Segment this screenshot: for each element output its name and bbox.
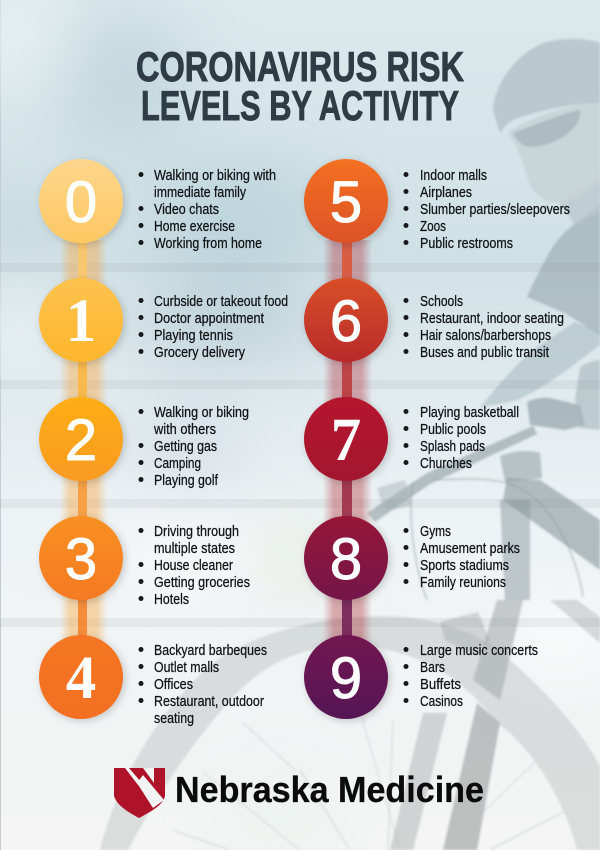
helmet <box>493 39 600 133</box>
risk level 8: Sports stadiums <box>420 558 509 574</box>
risk level 3: Getting groceries <box>154 575 250 591</box>
risk level 4: 4 <box>66 645 96 712</box>
risk level 6: Hair salons/barbershops <box>420 328 551 344</box>
risk level 3: multiple states <box>154 541 235 557</box>
risk level 2: Playing golf <box>154 473 219 489</box>
icon: shield <box>114 768 165 818</box>
title: LEVELS BY ACTIVITY <box>141 82 459 129</box>
risk level 5: Slumber parties/sleepovers <box>420 202 570 218</box>
risk level 6: Restaurant, indoor seating <box>420 311 564 327</box>
risk level 3: Hotels <box>154 592 189 608</box>
risk level 4: Offices <box>154 677 193 693</box>
risk level 0: Video chats <box>154 202 219 218</box>
risk level 9: Casinos <box>420 694 463 710</box>
risk level 4 <box>39 635 267 727</box>
connector lines: right column <box>323 240 372 680</box>
risk level 9: Buffets <box>420 677 461 693</box>
risk level 0: 0 <box>65 170 97 235</box>
risk level 5: Public restrooms <box>420 236 513 252</box>
risk level 4: Backyard barbeques <box>154 643 267 659</box>
risk level 0: Working from home <box>154 236 262 252</box>
sunglasses <box>513 110 580 147</box>
risk level 1: Playing tennis <box>154 328 233 344</box>
risk level 6 <box>304 278 564 362</box>
risk level 0: immediate family <box>154 185 247 201</box>
risk level 1: 1 <box>66 288 96 355</box>
risk level 8 <box>304 516 520 600</box>
risk level 4: Outlet malls <box>154 660 219 676</box>
risk level 5: 5 <box>330 170 362 235</box>
risk level 2: with others <box>153 422 216 438</box>
risk level 7: Splash pads <box>420 439 485 455</box>
risk level 2: Walking or biking <box>154 405 249 421</box>
risk level 4: seating <box>154 711 194 727</box>
risk level 2: 2 <box>65 408 97 473</box>
risk level 6: Buses and public transit <box>420 345 549 361</box>
risk level 8: 8 <box>330 527 362 592</box>
risk level 3: Driving through <box>154 524 239 540</box>
risk level 9: 9 <box>330 646 362 711</box>
risk level 6: 6 <box>330 289 362 354</box>
risk level 7 <box>304 397 519 481</box>
neck <box>560 175 600 225</box>
risk level 2 <box>39 397 249 489</box>
risk level 2: Getting gas <box>154 439 217 455</box>
connector lines: left column <box>60 240 107 680</box>
risk level 5 <box>304 159 570 252</box>
risk level 5: Indoor malls <box>420 168 487 184</box>
risk level 6: Schools <box>420 294 463 310</box>
risk level 9: Large music concerts <box>420 643 538 659</box>
torso <box>527 205 600 335</box>
risk level 1 <box>39 278 288 362</box>
risk level 3: 3 <box>65 527 97 592</box>
risk level 7: Churches <box>420 456 472 472</box>
risk level 5: Airplanes <box>420 185 472 201</box>
risk level 1: Doctor appointment <box>154 311 264 327</box>
handlebar <box>367 426 537 522</box>
risk level 3 <box>39 516 250 608</box>
risk level 7: Playing basketball <box>420 405 519 421</box>
fork and frame <box>390 713 447 850</box>
risk level 0: Home exercise <box>154 219 235 235</box>
risk level 7: 7 <box>331 407 361 474</box>
risk level 0 <box>39 159 276 252</box>
risk level 2: Camping <box>154 456 201 472</box>
risk level 0: Walking or biking with <box>154 168 276 184</box>
title <box>136 43 464 129</box>
risk level 9 <box>304 635 538 719</box>
risk level 7: Public pools <box>420 422 486 438</box>
logo: Nebraska Medicine: Nebraska Medicine <box>175 769 484 810</box>
risk level 8: Amusement parks <box>420 541 520 557</box>
arm, hand and glove <box>480 322 600 407</box>
risk level 1: Grocery delivery <box>154 345 246 361</box>
risk level 9: Bars <box>420 660 445 676</box>
logo: Nebraska Medicine <box>114 768 484 818</box>
risk level 8: Family reunions <box>420 575 506 591</box>
face <box>508 103 600 203</box>
title: CORONAVIRUS RISK <box>136 43 464 90</box>
risk level 5: Zoos <box>420 219 446 235</box>
risk level 3: House cleaner <box>154 558 233 574</box>
risk level 4: Restaurant, outdoor <box>154 694 264 710</box>
risk level 8: Gyms <box>420 524 451 540</box>
wheel <box>100 616 600 850</box>
risk level 1: Curbside or takeout food <box>154 294 288 310</box>
horizontal bands <box>0 263 600 627</box>
